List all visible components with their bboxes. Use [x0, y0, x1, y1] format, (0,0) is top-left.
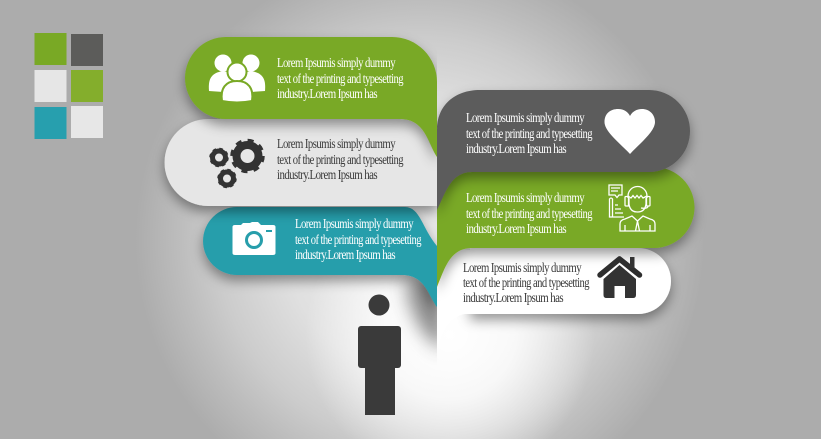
text: light grey: text of the printing and typesetting: [277, 152, 404, 167]
bubble: white body: [470, 248, 671, 314]
text: dark grey: industry.Lorem Ipsum has: [466, 141, 566, 156]
icon: heart: [604, 109, 655, 154]
text: white: Lorem Ipsumis simply dummy: [463, 260, 582, 275]
text: teal: text of the printing and typesetting: [295, 232, 422, 247]
text: teal: [295, 216, 422, 262]
text: teal: industry.Lorem Ipsum has: [295, 247, 395, 262]
colour swatches: [34, 33, 103, 139]
text: green lower: text of the printing and typesetting: [466, 206, 593, 221]
text: white: industry.Lorem Ipsum has: [463, 290, 563, 305]
icon: people: [209, 54, 265, 102]
text: dark grey: [466, 110, 593, 156]
right speech bubbles: [437, 88, 701, 328]
bubble: dark grey: [437, 90, 690, 210]
bubble: green top: [185, 37, 437, 157]
text: green lower: industry.Lorem Ipsum has: [466, 221, 566, 236]
text: green top: text of the printing and typesetting: [277, 71, 404, 86]
text: dark grey: Lorem Ipsumis simply dummy: [466, 110, 585, 125]
text: dark grey: text of the printing and typesetting: [466, 126, 593, 141]
person figure: [358, 294, 401, 415]
text: green lower: [466, 190, 593, 236]
icon: house: [600, 257, 640, 298]
text: light grey: Lorem Ipsumis simply dummy: [277, 136, 396, 151]
bubble tail: light grey: [414, 206, 437, 246]
text: white: text of the printing and typesetting: [463, 275, 590, 290]
text: green top: Lorem Ipsumis simply dummy: [277, 55, 396, 70]
bubble: teal: [203, 207, 437, 307]
icon: gears: [210, 140, 263, 187]
shadow under teal tail: [405, 280, 445, 350]
text: white: [463, 260, 590, 305]
text: green lower: Lorem Ipsumis simply dummy: [466, 190, 585, 205]
icon: camera: [232, 222, 276, 255]
icon: support agent: [609, 185, 655, 231]
left speech bubbles: [165, 37, 445, 350]
bubble: green lower: [437, 167, 694, 287]
bubble: white tail: [460, 250, 470, 314]
bubble: light grey: [165, 119, 437, 206]
text: green top: industry.Lorem Ipsum has: [277, 86, 377, 101]
text: green top: [277, 55, 404, 101]
text: teal: Lorem Ipsumis simply dummy: [295, 216, 414, 231]
text: light grey: industry.Lorem Ipsum has: [277, 167, 377, 182]
text: light grey: [277, 136, 404, 182]
